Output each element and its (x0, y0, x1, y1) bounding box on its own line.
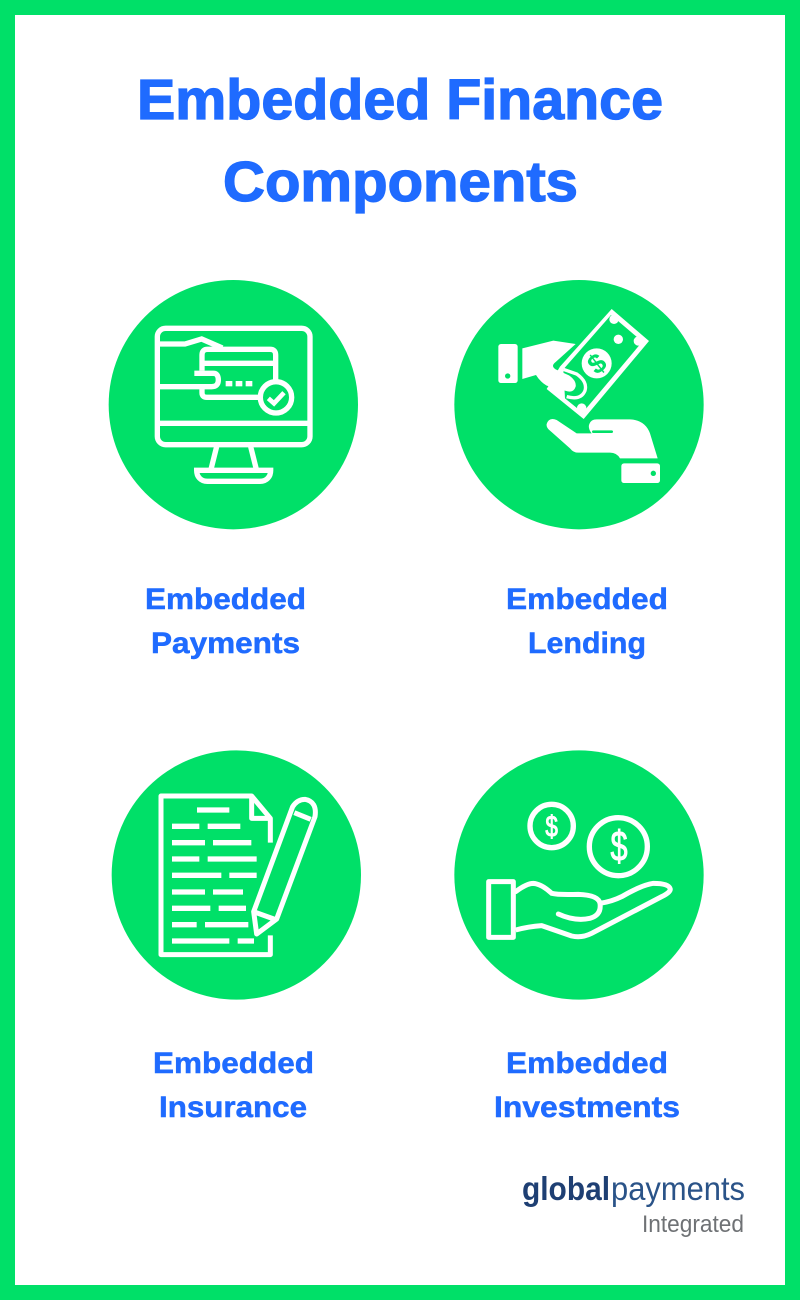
label: Embedded Payments: Embedded (145, 583, 306, 616)
icon: open hand with coins: $ (610, 822, 628, 870)
icon: hand passing cash to another hand: $ (581, 347, 612, 380)
icon: open hand with coins: $ (545, 809, 558, 843)
logo: Global Payments Integrated (522, 1170, 745, 1238)
label: Embedded Investments: Investments (494, 1091, 680, 1124)
logo: Global Payments Integrated: global (522, 1170, 610, 1207)
title: Embedded Finance (137, 68, 663, 132)
title (137, 68, 663, 214)
label: Embedded Payments (145, 583, 306, 660)
label: Embedded Lending (506, 583, 668, 660)
label: Embedded Investments: Embedded (506, 1047, 668, 1080)
label: Embedded Insurance: Insurance (159, 1091, 307, 1124)
logo: Global Payments Integrated: Integrated (642, 1211, 744, 1238)
label: Embedded Insurance (153, 1047, 314, 1124)
label: Embedded Investments (494, 1047, 680, 1124)
icon: open hand with coins (454, 750, 704, 1000)
label: Embedded Payments: Payments (151, 627, 300, 660)
icon: monitor with card payment (109, 280, 358, 529)
icon: hand passing cash to another hand (454, 280, 704, 529)
label: Embedded Insurance: Embedded (153, 1047, 314, 1080)
label: Embedded Lending: Embedded (506, 583, 668, 616)
label: Embedded Lending: Lending (528, 627, 646, 660)
logo: Global Payments Integrated: payments (611, 1170, 745, 1207)
title: Components (223, 150, 578, 214)
icon: document and pencil (112, 750, 361, 1000)
